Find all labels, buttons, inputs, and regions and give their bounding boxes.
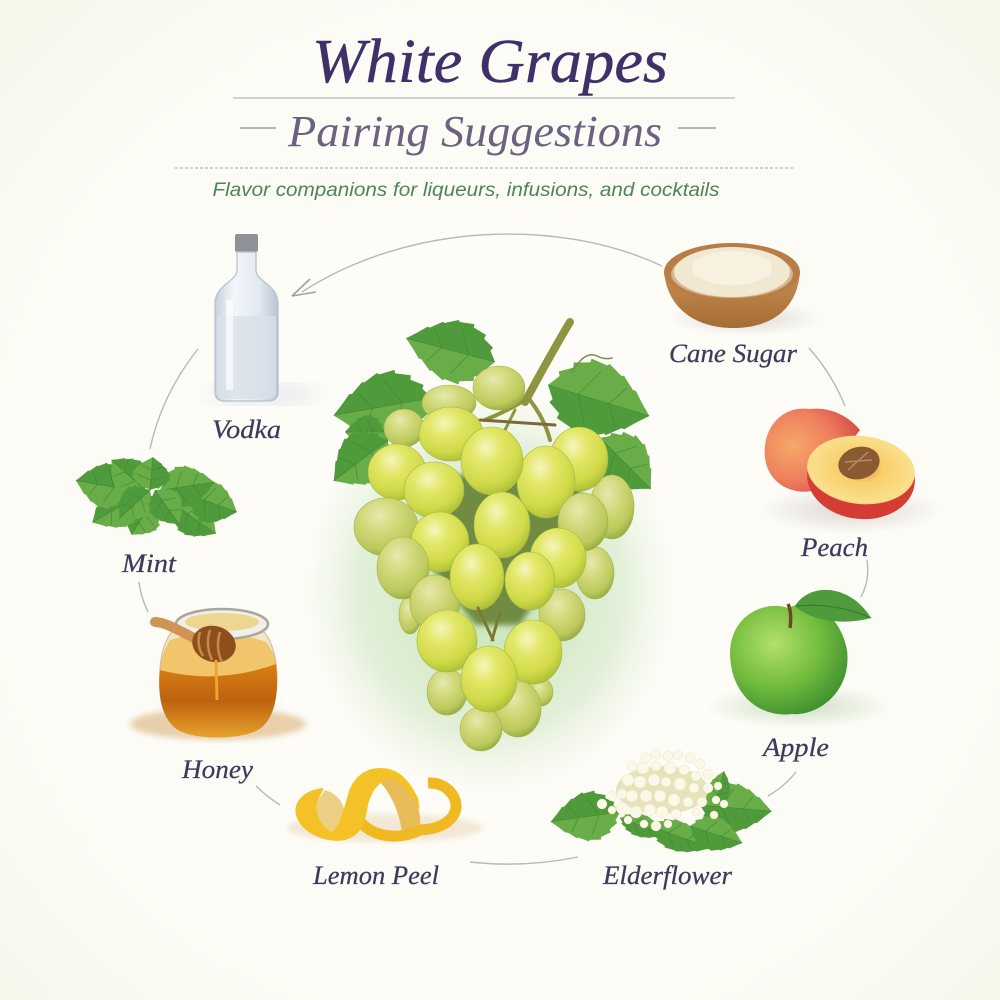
icon: lemon peel <box>287 768 483 842</box>
icon: green apple <box>706 590 890 728</box>
tagline: Flavor companions for liqueurs, infusions, and cocktails <box>212 180 720 201</box>
label: Elderflower: Elderflower <box>602 861 733 890</box>
grape leaves <box>317 308 670 508</box>
icon: honey jar <box>130 609 306 740</box>
title: White Grapes <box>312 28 668 96</box>
icon: cane sugar bowl <box>664 243 823 336</box>
stem <box>480 322 612 440</box>
label: Honey: Honey <box>181 755 253 784</box>
label: Cane Sugar: Cane Sugar <box>669 339 798 368</box>
shaded gaps between grapes <box>425 475 585 625</box>
arrow: circular flow connectors <box>139 234 868 864</box>
label: Vodka: Vodka <box>212 415 281 444</box>
label: Peach: Peach <box>800 533 868 562</box>
central grape illustration <box>302 308 678 795</box>
lower stem <box>478 608 500 640</box>
grapes <box>354 366 634 751</box>
icon: peach <box>758 409 942 534</box>
label: Lemon Peel: Lemon Peel <box>312 861 439 890</box>
subtitle: Pairing Suggestions: Pairing Suggestions <box>287 107 662 156</box>
icon: elderflower <box>547 749 774 863</box>
green watercolor wash <box>302 385 678 795</box>
icon: vodka bottle <box>207 234 317 404</box>
label: Mint: Mint <box>121 549 177 578</box>
label: Apple: Apple <box>761 733 829 762</box>
icon: mint leaves <box>72 446 244 549</box>
